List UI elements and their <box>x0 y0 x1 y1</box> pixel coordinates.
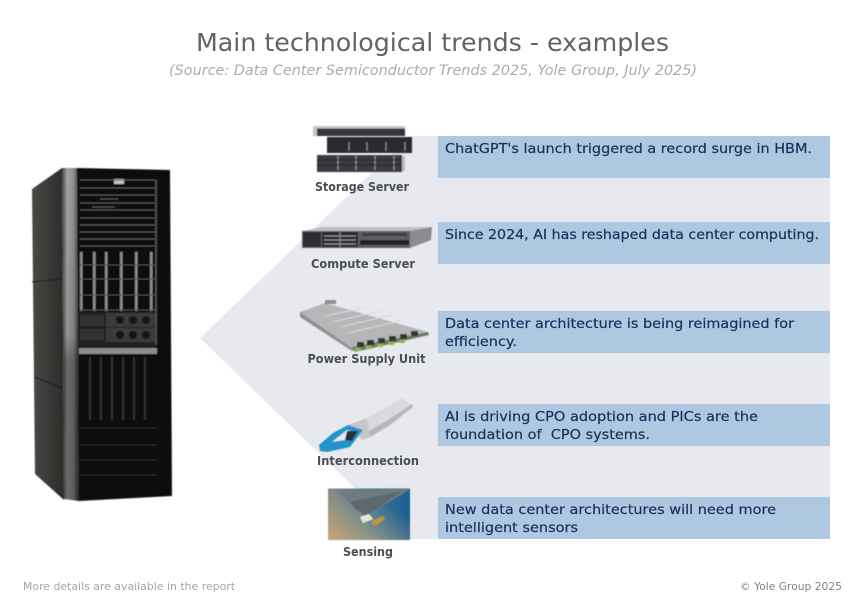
text box: CPO <box>438 404 830 446</box>
text box: architecture <box>438 311 830 353</box>
subtitle: source: (Source: Data Center Semiconductor Trends 2025, Yole Group, July 2025) <box>169 63 697 79</box>
text box: CPO: AI is driving CPO adoption and PICs are the <box>445 409 758 425</box>
icon: power supply unit <box>300 300 429 352</box>
text box: HBM: ChatGPT's launch triggered a record surge in HBM. <box>445 141 812 157</box>
label: Compute Server: Compute Server <box>311 257 415 271</box>
footer note: More details are available in the report <box>23 580 236 593</box>
text box: computing <box>438 222 830 264</box>
label: Sensing: Sensing <box>343 545 393 559</box>
icon: sensing photo <box>328 488 410 540</box>
text box: computing: Since 2024, AI has reshaped data center computing. <box>445 227 819 243</box>
text box: architecture: Data center architecture is being reimagined for <box>445 316 794 332</box>
text box: sensors: New data center architectures will need more <box>445 502 776 518</box>
icon: storage server <box>313 126 412 172</box>
text box: architecture: efficiency. <box>445 334 517 350</box>
title: Main technological trends - examples <box>196 28 669 57</box>
text box: HBM <box>438 136 830 178</box>
text box: sensors <box>438 497 830 539</box>
label: Interconnection: Interconnection <box>317 454 419 468</box>
label: Power Supply Unit: Power Supply Unit <box>308 352 426 366</box>
text box: CPO: foundation of CPO systems. <box>445 427 650 443</box>
icon: interconnection transceiver <box>319 398 413 452</box>
copyright: © Yole Group 2025 <box>740 580 842 593</box>
panel: grey callout wedge <box>200 136 830 539</box>
text box: sensors: intelligent sensors <box>445 520 578 536</box>
icon: data center rack <box>32 168 172 501</box>
label: Storage Server: Storage Server <box>315 180 409 194</box>
icon: compute server <box>302 227 432 248</box>
